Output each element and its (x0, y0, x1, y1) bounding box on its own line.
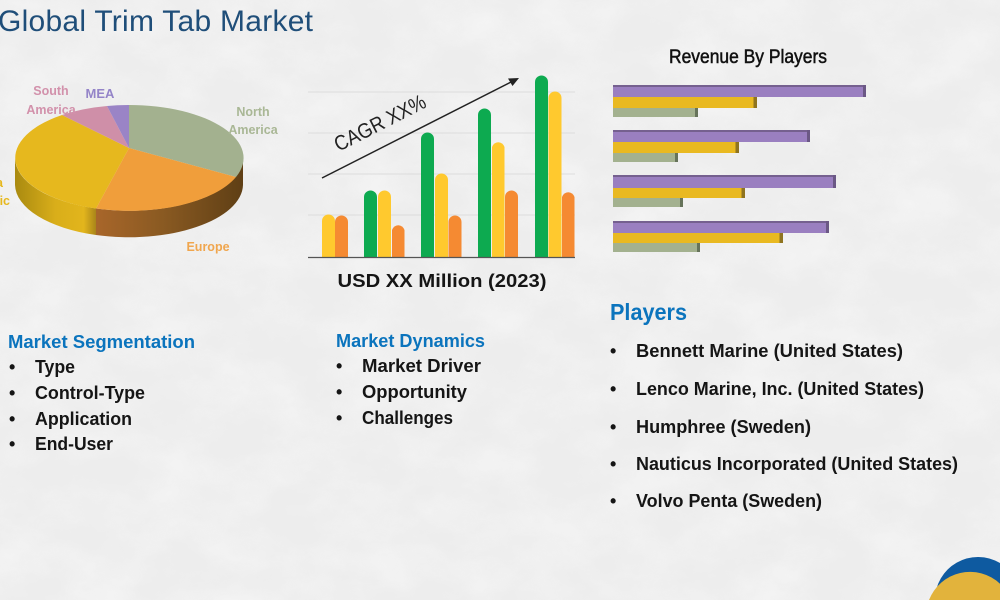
list: segments: Application (35, 409, 132, 429)
pie label: Europe: Europe (186, 240, 230, 254)
list: players: • (610, 491, 616, 511)
list: dynamics (336, 356, 481, 428)
pie label: North America: North (236, 105, 270, 119)
list: players: Humphree (Sweden) (636, 417, 811, 437)
list: dynamics: • (336, 382, 342, 402)
bars: group 4 (478, 109, 518, 257)
heading: players: Players (610, 299, 687, 325)
pie label: South America: America (26, 103, 77, 117)
slice: Europe (96, 148, 236, 211)
heading: market segmentation: Market Segmentation (8, 332, 195, 352)
list: players: • (610, 417, 616, 437)
bar chart: CAGR (308, 76, 575, 258)
list: players: • (610, 379, 616, 399)
list: segments: Control-Type (35, 383, 145, 403)
slice: MEA (107, 105, 129, 148)
bars: group 1 (322, 214, 348, 257)
icon: corner logo circles (929, 557, 1000, 600)
list: players (610, 341, 958, 511)
pie side: yellow (15, 158, 96, 235)
arrow: growth trend (322, 78, 519, 178)
panel: players (610, 299, 958, 511)
list: players: Lenco Marine, Inc. (United States) (636, 379, 924, 399)
bars: group 5 (535, 76, 574, 257)
panel: market segmentation (8, 332, 195, 454)
bar chart: revenue by players (613, 85, 866, 252)
bars: group 3 (421, 133, 462, 257)
list: segments (9, 357, 145, 454)
list: segments: End-User (35, 434, 113, 454)
slice: North America (129, 105, 244, 177)
list: dynamics: Market Driver (362, 356, 481, 376)
list: players: Volvo Penta (Sweden) (636, 491, 822, 511)
CAGR label: CAGR XX% (330, 90, 430, 156)
list: segments: • (9, 383, 15, 403)
list: dynamics: • (336, 408, 342, 428)
slice: South America (62, 106, 129, 148)
list: players: Nauticus Incorporated (United States) (636, 454, 958, 474)
list: dynamics: • (336, 356, 342, 376)
player 3 bars (613, 175, 836, 207)
pie label: South America (26, 84, 77, 117)
title: Global Trim Tab Market (0, 5, 314, 38)
pie label: South America: South (33, 84, 69, 98)
list: players: • (610, 341, 616, 361)
panel: market dynamics (336, 331, 485, 428)
list: dynamics: Opportunity (362, 382, 467, 402)
list: players: • (610, 454, 616, 474)
pie chart: market by region (15, 105, 244, 237)
chart caption: USD XX Million (2023) (338, 270, 546, 291)
player 2 bars (613, 130, 810, 162)
bars: group 2 (364, 190, 404, 257)
pie label: MEA: MEA (86, 86, 115, 101)
pie label: North America: America (228, 123, 279, 137)
pie label: Asia Pacific (0, 176, 10, 208)
list: segments: • (9, 409, 15, 429)
list: players: Bennett Marine (United States) (636, 341, 903, 361)
list: segments: • (9, 357, 15, 377)
slice: Asia Pacific (15, 115, 129, 208)
heading: market dynamics: Market Dynamics (336, 331, 485, 351)
pie side: orange (96, 158, 243, 237)
list: segments: Type (35, 357, 75, 377)
pie label: North America (228, 105, 279, 137)
heading: revenue by players: Revenue By Players (669, 47, 827, 68)
list: segments: • (9, 434, 15, 454)
player 4 bars (613, 221, 829, 252)
player 1 bars (613, 85, 866, 117)
list: dynamics: Challenges (362, 408, 453, 428)
